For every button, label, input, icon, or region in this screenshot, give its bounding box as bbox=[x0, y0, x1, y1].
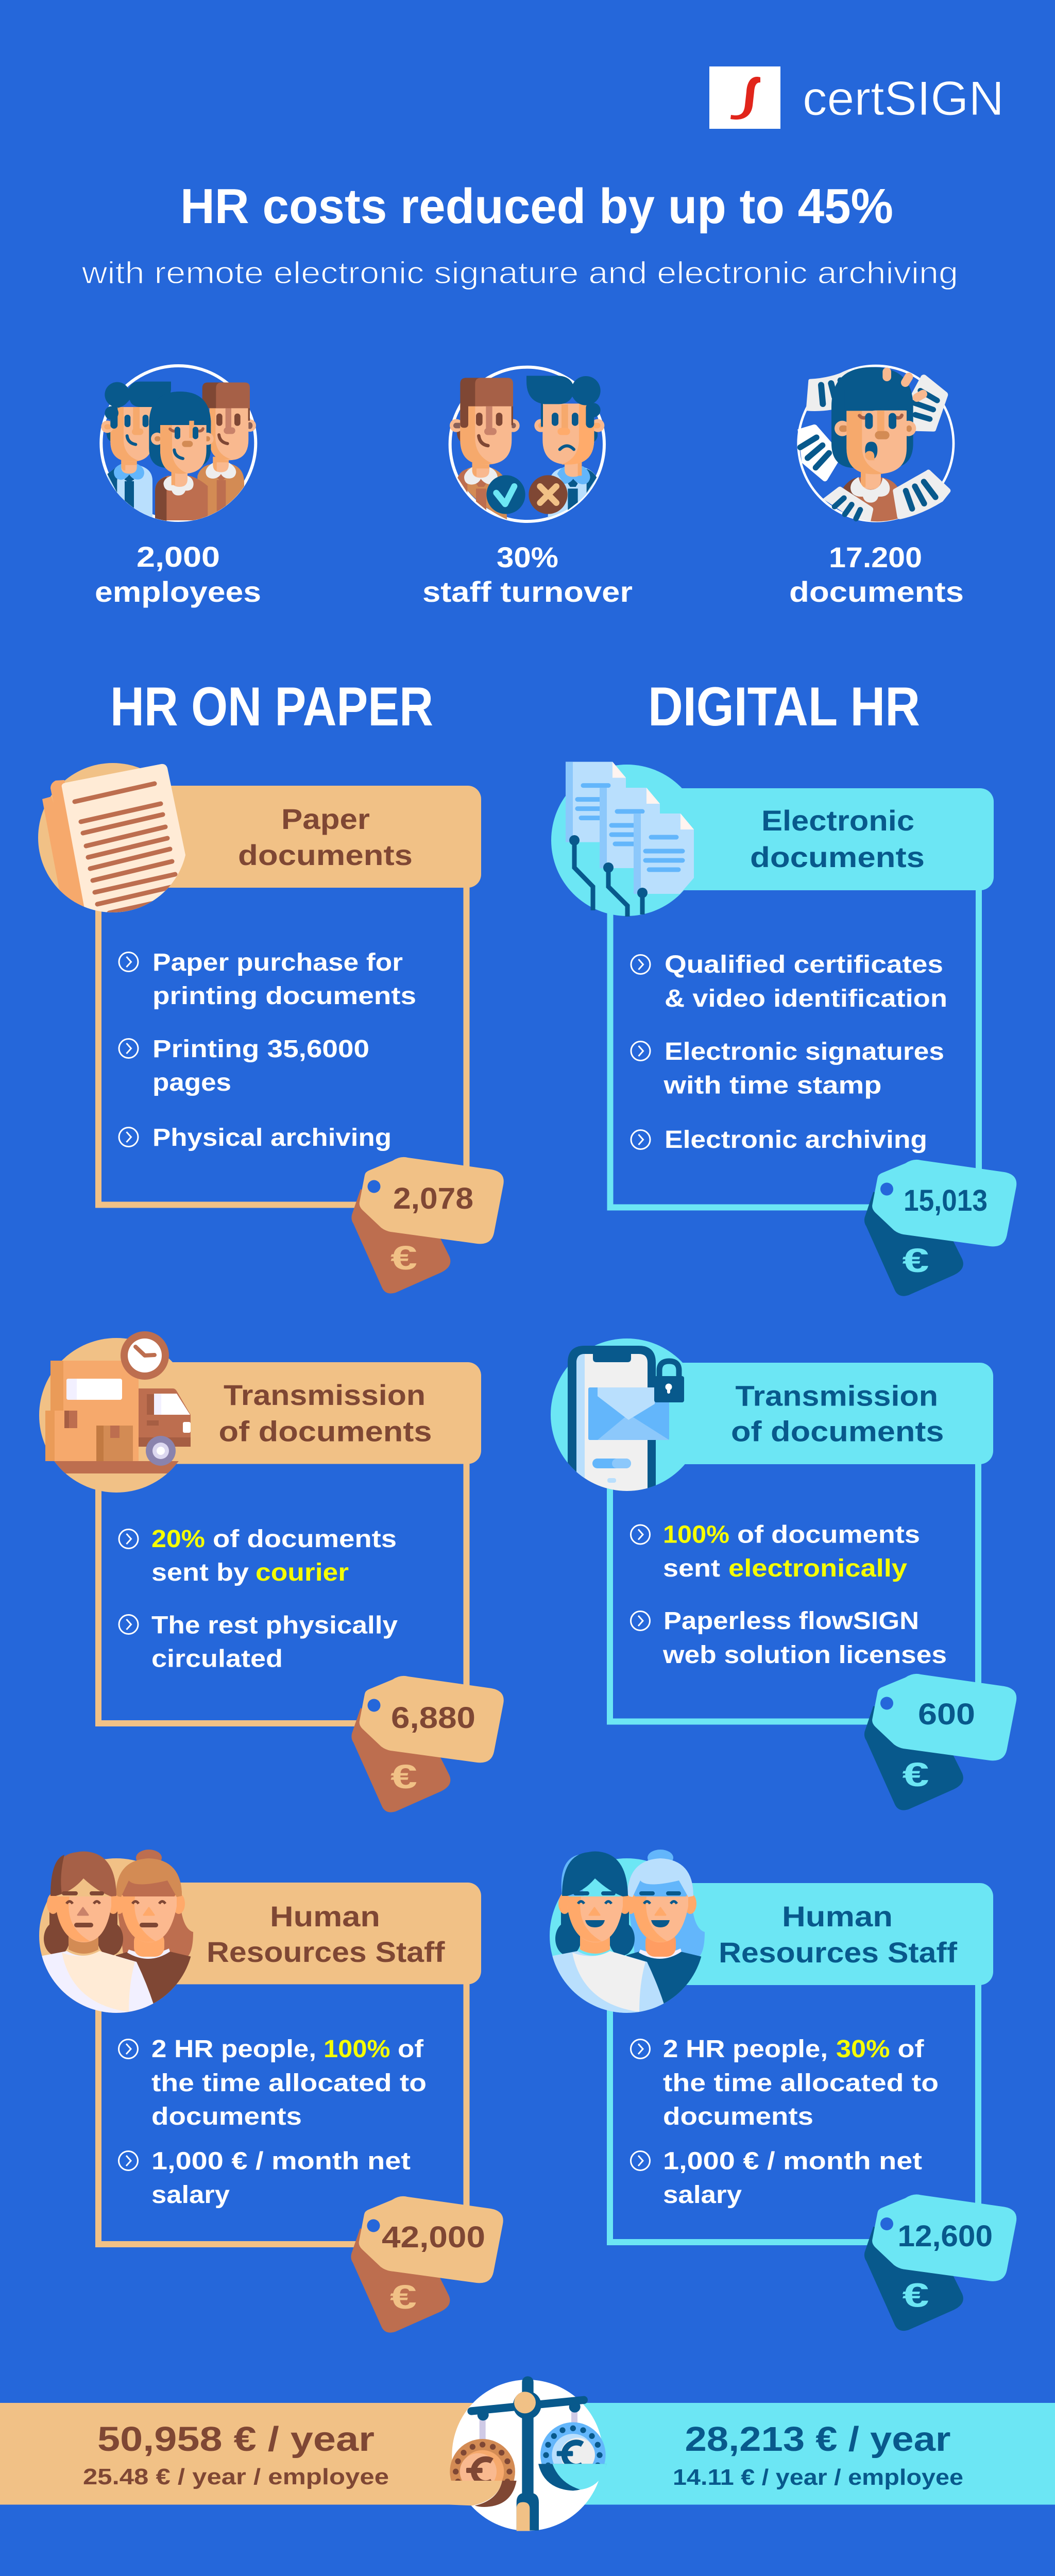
bullets: printing documents bbox=[152, 982, 416, 1010]
bullets: salary bbox=[151, 2181, 230, 2209]
band: yearly cost digital bbox=[528, 2403, 1055, 2505]
bullets: 20% bbox=[151, 1526, 205, 1553]
bullets: sent bbox=[663, 1555, 720, 1582]
price tag: 2,078 bbox=[393, 1182, 473, 1215]
bullets: 100% bbox=[324, 2036, 390, 2063]
person: woman bbox=[149, 392, 214, 521]
bullets: of bbox=[398, 2036, 424, 2063]
bullets: courier bbox=[256, 1559, 349, 1586]
icon: two HR women, happy bbox=[550, 1850, 706, 2017]
stat: documents bbox=[789, 541, 964, 608]
header text: Transmission bbox=[736, 1380, 938, 1412]
price tag bbox=[864, 1160, 1016, 1296]
bullets: circulated bbox=[151, 1646, 283, 1672]
bullets: of documents bbox=[213, 1526, 397, 1553]
bullets: 2 HR people, bbox=[663, 2036, 828, 2063]
panel: HR staff on paper bbox=[39, 1850, 503, 2333]
header bar bbox=[124, 786, 481, 888]
icon: check badge bbox=[486, 475, 525, 514]
bullets: 1,000 € / month net bbox=[151, 2147, 411, 2175]
stat: documents: 17.200 bbox=[829, 541, 922, 573]
price tag: 15,013 bbox=[904, 1184, 988, 1217]
stat: employees bbox=[95, 540, 261, 608]
header text: of documents bbox=[218, 1415, 432, 1448]
icon: two HR women, tired bbox=[39, 1850, 196, 2017]
icon: paper stack bbox=[38, 763, 188, 917]
price tag: 6,880 bbox=[391, 1701, 475, 1735]
header text bbox=[731, 1380, 944, 1448]
icon: staff turnover bbox=[450, 367, 604, 521]
paper sheets bbox=[797, 370, 950, 521]
header text: Electronic bbox=[761, 804, 914, 837]
stat: staff turnover bbox=[422, 541, 633, 608]
bullets: pages bbox=[152, 1069, 231, 1096]
total: digital: 28,213 € / year bbox=[685, 2420, 951, 2459]
header text: Human bbox=[270, 1900, 380, 1933]
icon: employees bbox=[101, 366, 256, 521]
person: unhappy man bbox=[526, 376, 604, 518]
panel: HR staff digital bbox=[550, 1850, 1016, 2331]
title: HR costs reduced by up to 45% bbox=[180, 179, 893, 234]
stat: staff turnover: 30% bbox=[497, 541, 558, 573]
bullets bbox=[119, 1526, 398, 1672]
header text bbox=[218, 1379, 432, 1448]
header text: Human bbox=[782, 1900, 893, 1933]
bullets: the time allocated to bbox=[663, 2070, 939, 2097]
bullets: of documents bbox=[737, 1521, 920, 1549]
header text: documents bbox=[238, 839, 413, 871]
bullets: The rest physically bbox=[151, 1612, 398, 1639]
header bar bbox=[639, 1883, 993, 1985]
head bbox=[831, 367, 916, 503]
bullets: web solution licenses bbox=[662, 1641, 947, 1669]
header text bbox=[207, 1900, 445, 1968]
panel: electronic documents bbox=[551, 762, 1016, 1296]
price tag bbox=[351, 1157, 504, 1294]
heading: digital HR: DIGITAL HR bbox=[648, 675, 920, 737]
stat: documents: documents bbox=[789, 575, 964, 608]
header text: Paper bbox=[281, 803, 370, 835]
bullets bbox=[631, 951, 947, 1154]
logo: certSIGN: certSIGN bbox=[803, 71, 1004, 125]
bullets: sent by bbox=[151, 1559, 249, 1586]
total: paper: 25.48 € / year / employee bbox=[83, 2464, 389, 2489]
header text bbox=[750, 804, 925, 873]
icon: phone with envelope and lock bbox=[551, 1338, 685, 1491]
header text: documents bbox=[750, 841, 925, 873]
bullets: 100% bbox=[663, 1521, 729, 1549]
bullets: salary bbox=[663, 2181, 742, 2209]
bullets: Qualified certificates bbox=[665, 951, 943, 978]
header text: of documents bbox=[731, 1415, 944, 1448]
total: digital: 14.11 € / year / employee bbox=[673, 2465, 963, 2490]
header text: Resources Staff bbox=[207, 1936, 445, 1968]
bullets: & video identification bbox=[665, 985, 947, 1012]
price tag bbox=[351, 1676, 504, 1812]
bullets: the time allocated to bbox=[151, 2070, 427, 2097]
bullets bbox=[631, 1521, 947, 1669]
bullets: documents bbox=[151, 2103, 302, 2130]
total: paper bbox=[83, 2420, 389, 2489]
bullets: 2 HR people, bbox=[151, 2036, 316, 2063]
price tag bbox=[864, 1674, 1016, 1810]
heading: HR on paper: HR ON PAPER bbox=[110, 675, 433, 737]
bullets bbox=[631, 2036, 939, 2209]
header bar bbox=[639, 1363, 993, 1464]
logo: certSIGN bbox=[709, 66, 1004, 129]
price tag: 42,000 bbox=[382, 2221, 485, 2254]
right coin and pan bbox=[538, 2422, 606, 2490]
bullets: 30% bbox=[836, 2036, 890, 2063]
price tag: € bbox=[390, 1239, 417, 1277]
header text: Resources Staff bbox=[719, 1936, 957, 1969]
bullets: Electronic signatures bbox=[665, 1038, 944, 1065]
header bar bbox=[124, 1362, 481, 1464]
price tag: 600 bbox=[918, 1698, 975, 1731]
bullets: Printing 35,6000 bbox=[152, 1036, 369, 1063]
price tag bbox=[864, 2194, 1016, 2331]
person: left man bbox=[101, 382, 171, 520]
panel: paper documents bbox=[38, 763, 504, 1294]
bullets: with time stamp bbox=[663, 1072, 882, 1099]
icon: cross badge bbox=[529, 475, 568, 514]
bullets: Physical archiving bbox=[152, 1124, 392, 1151]
fingers bbox=[887, 372, 923, 398]
bullets: electronically bbox=[728, 1555, 907, 1582]
price tag: € bbox=[903, 2276, 929, 2314]
total: digital bbox=[673, 2420, 963, 2490]
stat: staff turnover: staff turnover bbox=[422, 575, 633, 608]
header text bbox=[238, 803, 413, 871]
panel: transmission on paper bbox=[36, 1331, 504, 1812]
header text bbox=[719, 1900, 957, 1969]
icon: documents overload bbox=[797, 366, 954, 521]
bullets: 1,000 € / month net bbox=[663, 2147, 922, 2175]
bullets: documents bbox=[663, 2103, 813, 2130]
bullets bbox=[118, 2036, 427, 2209]
header text: Transmission bbox=[224, 1379, 426, 1411]
header bar bbox=[639, 788, 994, 890]
price tag bbox=[351, 2196, 503, 2333]
bullets: Paper purchase for bbox=[152, 949, 403, 976]
bullets: Paperless flowSIGN bbox=[663, 1607, 919, 1635]
person: right man bbox=[197, 382, 256, 521]
price tag: 12,600 bbox=[897, 2219, 993, 2253]
body bbox=[843, 478, 898, 521]
price tag: € bbox=[390, 1757, 417, 1795]
stat: employees: 2,000 bbox=[137, 540, 220, 573]
icon: delivery truck bbox=[36, 1331, 194, 1493]
stat: employees: employees bbox=[95, 575, 261, 608]
bullets: of bbox=[897, 2036, 925, 2063]
header bar bbox=[124, 1883, 481, 1985]
price tag: € bbox=[903, 1755, 929, 1793]
person: happy man bbox=[450, 378, 520, 519]
price tag: € bbox=[390, 2278, 417, 2316]
icon: balance scale bbox=[443, 2376, 606, 2531]
bullets bbox=[119, 949, 416, 1151]
panel: electronic transmission bbox=[551, 1338, 1016, 1810]
left coin and pan bbox=[443, 2439, 517, 2507]
total: paper: 50,958 € / year bbox=[97, 2420, 375, 2459]
subtitle: with remote electronic signature and electronic archiving bbox=[81, 256, 958, 290]
price tag: € bbox=[903, 1241, 929, 1279]
band: yearly cost on paper bbox=[0, 2403, 528, 2505]
bullets: Electronic archiving bbox=[665, 1126, 927, 1154]
icon: electronic documents bbox=[551, 762, 703, 917]
